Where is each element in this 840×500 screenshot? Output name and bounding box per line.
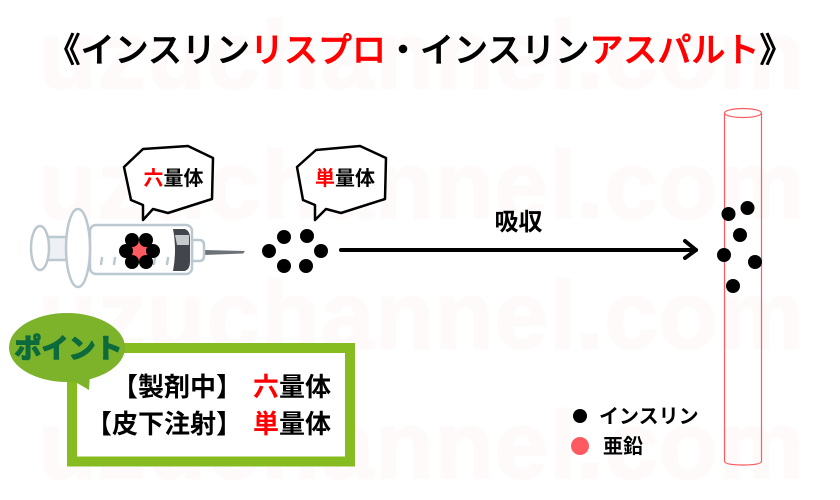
text: uzuchannel.com	[38, 132, 804, 239]
text: uzuchannel.com	[38, 392, 804, 499]
insulin dots in vessel	[717, 201, 762, 293]
legend	[571, 406, 699, 458]
heading: point badge	[9, 313, 125, 390]
hexamer: six insulin dots around zinc	[119, 233, 160, 269]
text: uzuchannel.com	[38, 2, 804, 109]
monomer dots	[262, 229, 328, 273]
icon: syringe	[31, 209, 244, 287]
text: uzuchannel.com	[38, 262, 804, 369]
title: 《インスリンリスプロ・インスリンアスパルト》	[47, 32, 793, 70]
label: absorption: 吸収	[494, 209, 542, 236]
text: hexamer: 六量体	[253, 372, 331, 402]
arrow: absorption	[341, 241, 696, 258]
text: formulation: 【製剤中】	[112, 372, 242, 402]
text: monomer: 単量体	[253, 409, 331, 439]
callout: hexamer	[124, 146, 213, 220]
text: subcutaneous: 【皮下注射】	[86, 409, 242, 439]
legend: 亜鉛	[603, 435, 643, 458]
heading: point badge: ポイント	[14, 334, 122, 364]
callout: monomer	[297, 146, 386, 220]
blood vessel	[724, 108, 762, 465]
callout: monomer: 単量体	[315, 167, 375, 190]
legend: インスリン	[599, 406, 699, 428]
panel: point box	[9, 313, 350, 462]
callout: hexamer: 六量体	[144, 167, 204, 190]
